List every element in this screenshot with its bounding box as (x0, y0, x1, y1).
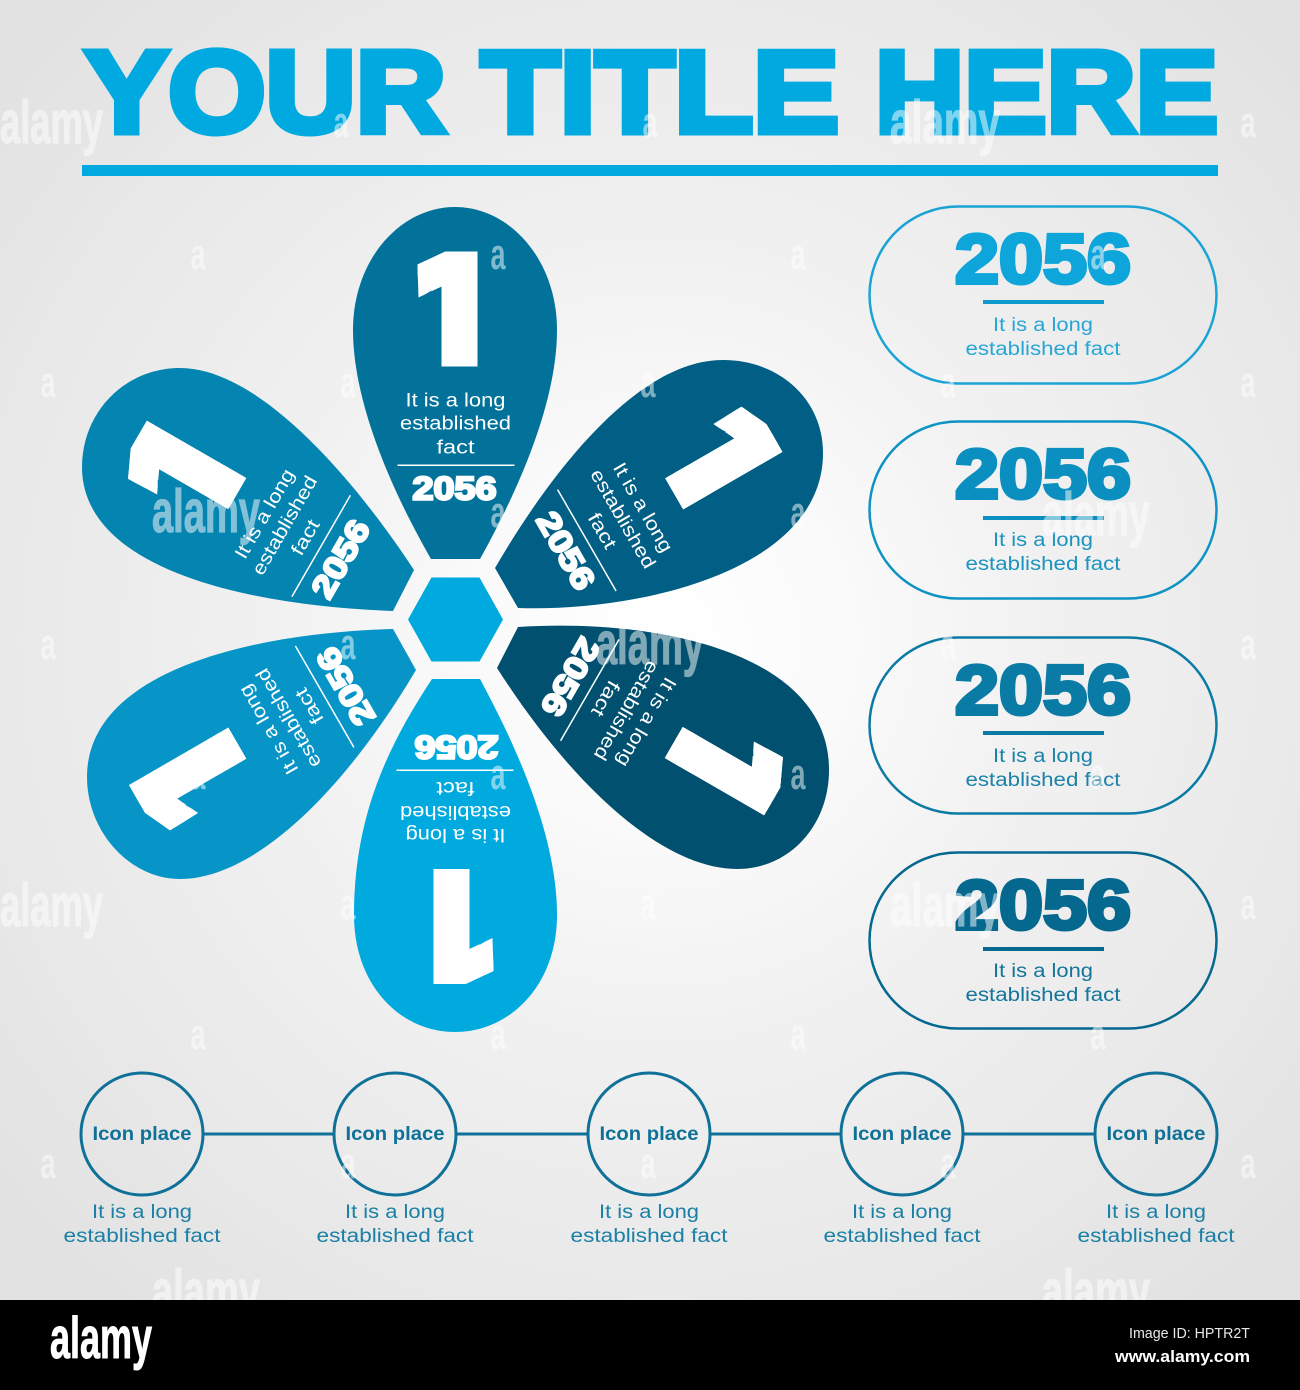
petal: top: established (400, 414, 511, 434)
stock watermarks: a (940, 1139, 956, 1188)
petal: upper right (495, 360, 839, 612)
petal: lower left: 1 (86, 687, 293, 860)
stat pill 3: 2056 (955, 651, 1131, 729)
petal: top: 2056 (412, 470, 496, 506)
stock watermarks: a (1240, 1139, 1256, 1188)
timeline item 2: It is a long (345, 1202, 445, 1223)
stock watermarks: a (642, 98, 658, 147)
stock watermarks: a (490, 750, 506, 799)
timeline item 4: established fact (824, 1226, 981, 1247)
stock watermarks: alamy (0, 89, 103, 156)
stock watermarks: alamy (0, 872, 103, 939)
petal: upper right: 1 (621, 363, 828, 536)
footer bar: Image ID: HPTR2T (1129, 1325, 1250, 1342)
footer bar: www.alamy.com (1114, 1347, 1250, 1366)
title: TITLE (481, 27, 839, 157)
stock watermarks: alamy (1042, 1258, 1150, 1325)
stat pill 4: 2056 (955, 866, 1131, 944)
petal: bottom (354, 679, 557, 1032)
stat pill 4: established fact (966, 985, 1121, 1006)
timeline item 3: established fact (570, 1226, 728, 1247)
petal: upper right: It is a long (608, 459, 676, 556)
stat pill 2: It is a long (993, 530, 1093, 551)
stock watermarks: alamy (890, 89, 1000, 156)
stock watermarks: a (790, 750, 806, 799)
stat pill 1 (870, 206, 1216, 384)
timeline item 1 (64, 1073, 221, 1247)
stock watermarks: alamy (890, 872, 1000, 939)
title underline (82, 165, 1218, 176)
stock watermarks: a (1090, 230, 1106, 279)
stock watermarks: a (940, 358, 956, 407)
timeline item 2: established fact (316, 1226, 474, 1247)
stock watermarks: a (1240, 880, 1256, 929)
petal: bottom: fact (436, 777, 474, 798)
title: HERE (875, 27, 1218, 157)
petal: top: 1 (400, 208, 492, 394)
petal: lower right (497, 619, 842, 870)
timeline item 1: It is a long (92, 1202, 192, 1223)
stat pill 1: established fact (966, 339, 1121, 360)
stock watermarks: a (40, 620, 56, 669)
stock watermarks: a (640, 1139, 656, 1188)
petal: lower left: fact (291, 683, 329, 727)
petal: lower left: 2056 (309, 641, 382, 732)
stat pill 4: It is a long (993, 961, 1093, 982)
footer bar (0, 1300, 1300, 1390)
stat pill 3 (870, 638, 1216, 814)
petal: bottom: It is a long (406, 824, 506, 845)
stat pill 1: 2056 (955, 220, 1131, 298)
stock watermarks: a (790, 1010, 806, 1059)
petal: lower left (72, 625, 416, 879)
timeline item 2: Icon place (346, 1124, 444, 1145)
stock watermarks: a (334, 98, 349, 147)
timeline item 4: It is a long (852, 1202, 952, 1223)
centre hexagon (408, 578, 503, 662)
stock watermarks: a (790, 488, 806, 537)
stock watermarks: a (190, 230, 206, 279)
petal: upper left: It is a long (231, 466, 299, 563)
stat pill 3: established fact (966, 770, 1121, 791)
petal: lower right: It is a long (612, 673, 680, 770)
timeline item 3: It is a long (599, 1202, 699, 1223)
stock watermarks: a (190, 750, 206, 799)
petal: bottom: 1 (419, 842, 512, 1028)
stock watermarks: a (790, 230, 806, 279)
stat pill 2 (870, 422, 1216, 598)
timeline item 5: established fact (1078, 1226, 1235, 1247)
stock watermarks: a (340, 880, 356, 929)
petal: upper right: established (585, 466, 659, 573)
stock watermarks: alamy (1042, 481, 1150, 548)
stock watermarks: a (1240, 358, 1256, 407)
stock watermarks: a (40, 1139, 56, 1188)
petal: lower left: 1 (83, 701, 291, 874)
stock watermarks: alamy (152, 478, 260, 545)
petal: upper right: fact (583, 510, 621, 554)
petal: upper left: fact (287, 515, 325, 559)
stock watermarks: alamy (152, 1258, 260, 1325)
timeline item 4 (824, 1073, 981, 1247)
title (85, 27, 1218, 157)
petal: top: 1 (410, 216, 503, 402)
timeline item 1: Icon place (92, 1124, 192, 1145)
stat pill 3: It is a long (993, 746, 1093, 767)
petal: bottom: 1 (408, 833, 500, 1019)
petal: upper left: established (248, 472, 322, 579)
timeline item 5: It is a long (1106, 1202, 1206, 1223)
petal: lower left: It is a long (235, 681, 303, 778)
petal: top (353, 207, 557, 559)
petal: bottom: established (400, 801, 511, 822)
stock watermarks: a (490, 1010, 506, 1059)
stock watermarks: a (340, 1139, 356, 1188)
stock watermarks: a (340, 358, 356, 407)
timeline connector (204, 1132, 1094, 1136)
petal: lower right: 2056 (534, 632, 607, 723)
petal: lower right: fact (586, 677, 624, 721)
petal: upper right: 1 (618, 377, 826, 550)
petal: lower right: 1 (634, 677, 841, 850)
petal: upper left: 1 (83, 381, 291, 554)
petal: top: fact (436, 438, 475, 458)
stock watermarks: a (1240, 98, 1256, 147)
petal: top: It is a long (406, 390, 506, 412)
stock watermarks: a (640, 358, 656, 407)
timeline item 5: Icon place (1106, 1124, 1206, 1145)
petal: lower right: 1 (620, 682, 828, 855)
timeline item 2 (316, 1073, 474, 1247)
stat pill 2: established fact (966, 554, 1121, 575)
petal: upper left: 2056 (304, 513, 377, 604)
petal: upper right: 2056 (529, 505, 603, 596)
stock watermarks: a (190, 1010, 206, 1059)
stock watermarks: a (40, 358, 56, 407)
stock watermarks: a (940, 620, 956, 669)
timeline item 3: Icon place (600, 1124, 698, 1145)
stock watermarks: a (340, 620, 356, 669)
stock watermarks: a (490, 230, 506, 279)
timeline item 4: Icon place (852, 1124, 952, 1145)
footer bar: alamy (50, 1306, 152, 1371)
stock watermarks: a (1090, 750, 1106, 799)
petal: lower right: established (589, 657, 663, 764)
petal: bottom: 2056 (414, 729, 498, 765)
timeline item 3 (570, 1073, 728, 1247)
petal: upper left: 1 (70, 386, 277, 559)
petal: upper left (69, 366, 414, 617)
title: YOUR (85, 27, 446, 157)
stock watermarks: alamy (596, 610, 704, 677)
petal: lower left: established (252, 664, 326, 771)
timeline item 1: established fact (64, 1226, 221, 1247)
stat pill 1: It is a long (993, 315, 1093, 336)
stock watermarks: a (1090, 1010, 1106, 1059)
stat pill 4 (870, 852, 1216, 1028)
flower diagram (69, 207, 842, 1032)
stock watermarks: a (490, 488, 506, 537)
stock watermarks: a (1240, 620, 1256, 669)
stat pill 2: 2056 (955, 435, 1131, 513)
stock watermarks: a (640, 880, 656, 929)
timeline item 5 (1078, 1073, 1235, 1247)
